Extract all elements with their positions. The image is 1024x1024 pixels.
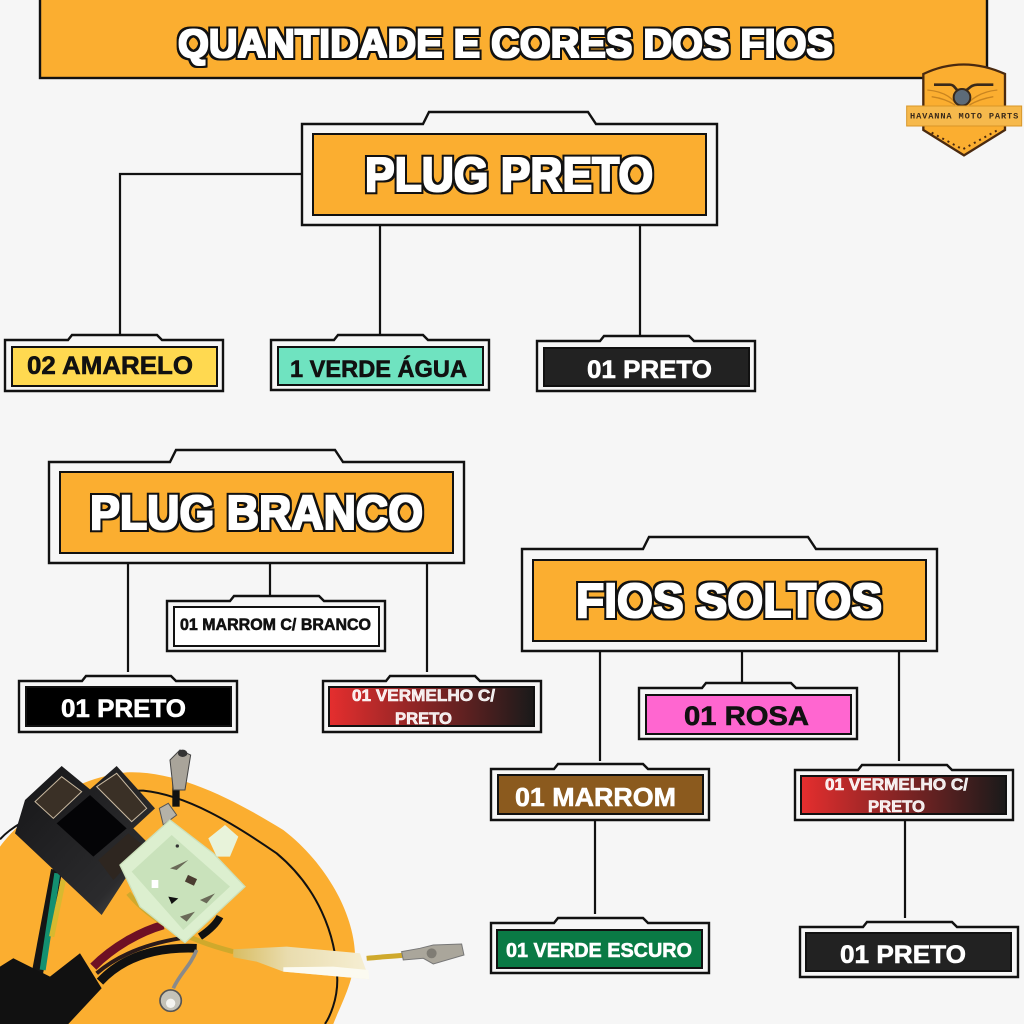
wire label: 01 rosa [639, 683, 857, 739]
connector lines: plug branco [128, 563, 427, 672]
wire label: 01 vermelho c/ preto: 01 VERMELHO C/ [352, 687, 495, 705]
connector lines: fios soltos [595, 651, 905, 918]
wire label: 01 marrom [491, 764, 709, 820]
wire label: 01 preto: 01 PRETO [61, 695, 186, 723]
black plug connector [15, 766, 155, 915]
title banner [40, 0, 987, 78]
black sleeves [0, 953, 102, 1024]
bullet terminal top [159, 750, 191, 825]
wire label: 01 preto [19, 676, 237, 732]
wire label: 01 preto [537, 336, 755, 391]
wire label: 01 vermelho c/ preto: PRETO [868, 798, 925, 816]
heading panel: fios soltos [522, 537, 937, 651]
connector lines: plug preto [120, 174, 640, 335]
wire label: 1 verde agua: 1 VERDE ÁGUA [290, 355, 467, 383]
ring terminal bottom [160, 990, 181, 1011]
wire label: 01 preto: 01 PRETO [840, 941, 966, 969]
heading panel: plug branco [49, 450, 464, 563]
wire label: 01 verde escuro: 01 VERDE ESCURO [506, 940, 692, 962]
orange blob [0, 772, 355, 1024]
wire label: 01 rosa: 01 ROSA [684, 701, 809, 731]
wire label: 01 vermelho c/ preto [795, 765, 1013, 820]
wire label: 02 amarelo [5, 335, 223, 391]
wire label: 01 marrom c/ branco: 01 MARROM C/ BRANCO [180, 616, 371, 634]
logo: havanna moto parts: HAVANNA MOTO PARTS [910, 112, 1018, 122]
heading panel: plug branco: PLUG BRANCO [90, 487, 423, 540]
white plug connector [120, 820, 245, 943]
wire label: 02 amarelo: 02 AMARELO [27, 352, 193, 380]
wire label: 01 verde escuro [491, 918, 709, 973]
heading panel: plug preto: PLUG PRETO [365, 149, 653, 202]
wire label: 01 preto [800, 922, 1018, 977]
yellow wire with sleeve and terminal [128, 893, 464, 979]
wire label: 01 vermelho c/ preto [323, 676, 541, 732]
wire label: 1 verde agua [271, 335, 489, 390]
title banner: QUANTIDADE E CORES DOS FIOS [178, 22, 833, 66]
heading panel: fios soltos: FIOS SOLTOS [576, 575, 882, 628]
dark wire bundle [93, 917, 220, 988]
heading panel: plug preto [302, 112, 717, 225]
wire label: 01 vermelho c/ preto: 01 VERMELHO C/ [825, 776, 968, 794]
green and yellow wires [37, 870, 63, 973]
black outline curve [0, 791, 337, 1024]
wire label: 01 marrom c/ branco [167, 596, 385, 651]
logo: havanna moto parts [907, 64, 1022, 155]
product photo: plug connectors and wires on orange blob [0, 750, 464, 1024]
wire label: 01 marrom: 01 MARROM [515, 782, 676, 812]
wire label: 01 preto: 01 PRETO [587, 356, 712, 384]
wire label: 01 vermelho c/ preto: PRETO [395, 710, 452, 728]
